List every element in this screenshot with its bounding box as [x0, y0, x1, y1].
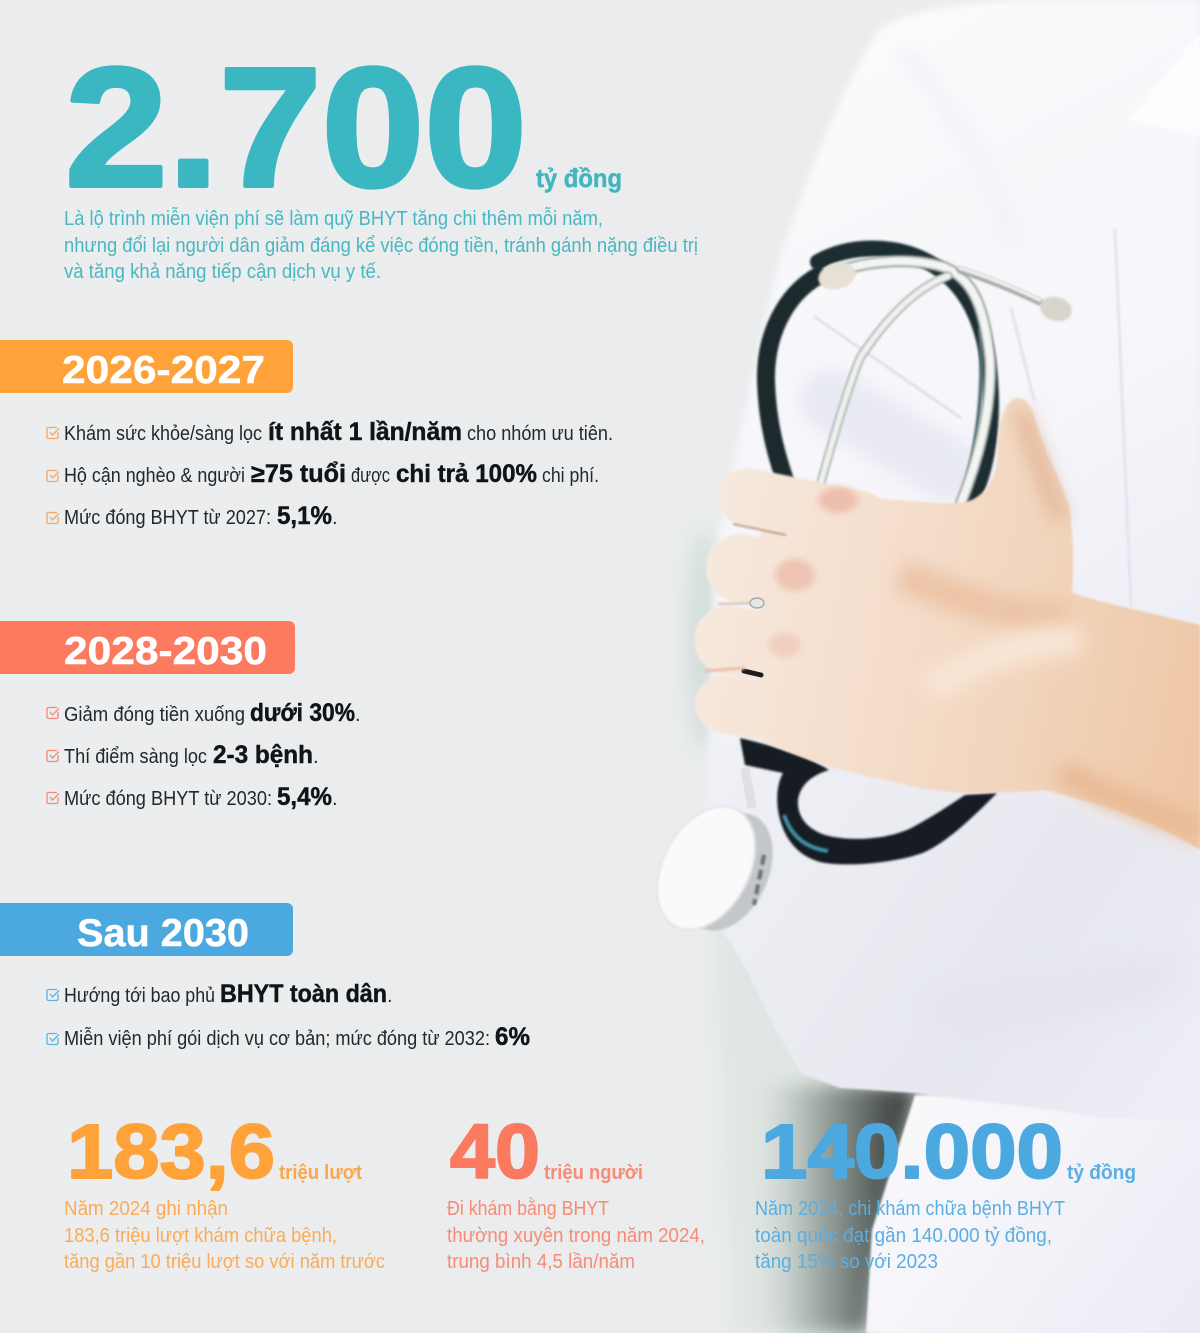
stat: 183,6 triệu lượt	[64, 1109, 385, 1273]
item 1: Khám sức khỏe/sàng lọc	[64, 423, 262, 445]
item 2: 2-3 bệnh	[213, 741, 313, 769]
stat: 40 triệu người: triệu người	[544, 1162, 643, 1184]
finger gaps	[733, 524, 786, 535]
coat lapel panel	[1128, 33, 1200, 137]
item 3: .	[332, 788, 338, 810]
coat upper body	[700, 0, 1200, 900]
intro paragraph: Là lộ trình miễn viện phí sẽ làm quỹ BHYT tăng chi thêm mỗi năm,	[64, 207, 603, 230]
stat: 140.000 tỷ đồng	[755, 1109, 1136, 1273]
item 1	[47, 699, 361, 727]
item 1: dưới 30%	[250, 699, 355, 727]
intro paragraph: nhưng đổi lại người dân giảm đáng kể việc đóng tiền, tránh gánh nặng điều trị	[64, 235, 698, 257]
stethoscope ear tips	[815, 259, 859, 293]
chest piece disc	[637, 790, 775, 946]
item 3: 5,1%	[277, 502, 332, 530]
halo behind hand	[687, 530, 719, 750]
lower coat soft fold	[930, 970, 1180, 1010]
item 3	[47, 783, 338, 811]
coat fold shadows	[815, 50, 1131, 606]
badge: Sau 2030: Sau 2030	[77, 912, 249, 955]
item 1: BHYT toàn dân	[220, 980, 387, 1008]
coat skirt below hem	[866, 1095, 1200, 1333]
stat: 183,6 triệu lượt: 183,6	[67, 1109, 275, 1195]
item 2: .	[313, 746, 319, 768]
headline unit: tỷ đồng	[536, 163, 622, 193]
item 2: Thí điểm sàng lọc	[64, 746, 207, 768]
item 2: chi trả 100%	[396, 460, 537, 488]
stat: 140.000 tỷ đồng: tỷ đồng	[1067, 1162, 1136, 1184]
ring	[750, 598, 764, 608]
finger: pinky	[724, 704, 860, 725]
tube highlight	[784, 815, 828, 851]
hand body and arm	[760, 398, 1200, 850]
stat: 40 triệu người: Đi khám bằng BHYT	[447, 1197, 609, 1220]
hand shading	[704, 410, 1200, 830]
stat: 140.000 tỷ đồng: Năm 2024, chi khám chữa bệnh BHYT	[755, 1198, 1065, 1220]
hand highlight	[930, 640, 1080, 690]
item 3: Mức đóng BHYT từ 2030:	[64, 788, 272, 810]
stat: 40 triệu người: thường xuyên trong năm 2024,	[447, 1225, 705, 1247]
item 1: ít nhất 1 lần/năm	[268, 418, 462, 446]
item 3: .	[332, 507, 338, 529]
stat: 140.000 tỷ đồng: toàn quốc đạt gần 140.000 tỷ đồng,	[755, 1225, 1052, 1247]
badge: 2026-2027	[0, 340, 293, 393]
badge: 2028-2030: 2028-2030	[64, 630, 267, 673]
dark shadow under coat hem	[745, 1085, 920, 1333]
badge: Sau 2030	[0, 903, 293, 956]
item 1: cho nhóm ưu tiên.	[467, 423, 613, 445]
stat: 183,6 triệu lượt: triệu lượt	[279, 1162, 362, 1184]
stat: 40 triệu người	[447, 1109, 705, 1273]
finger: ring	[728, 640, 860, 660]
item 1: .	[387, 985, 393, 1007]
item 3: 5,4%	[277, 783, 332, 811]
stat: 140.000 tỷ đồng: 140.000	[761, 1109, 1063, 1195]
list: 2028-2030	[47, 699, 361, 811]
item 2	[47, 460, 599, 488]
item 2: Miễn viện phí gói dịch vụ cơ bản; mức đóng từ 2032:	[64, 1027, 490, 1050]
stat: 140.000 tỷ đồng: tăng 15% so với 2023	[755, 1251, 938, 1273]
item 2: 6%	[495, 1023, 530, 1051]
tube	[740, 738, 997, 864]
stat: 183,6 triệu lượt: Năm 2024 ghi nhận	[64, 1198, 228, 1220]
arm shadow	[1060, 770, 1200, 830]
badge: 2026-2027: 2026-2027	[62, 349, 265, 392]
intro paragraph: và tăng khả năng tiếp cận dịch vụ y tế.	[64, 261, 381, 283]
item 2: ≥75 tuổi	[251, 460, 346, 488]
finger: middle	[740, 568, 860, 590]
knuckles	[818, 487, 858, 513]
stem	[745, 768, 752, 808]
tendon shadow	[900, 575, 1070, 616]
stethoscope lower tube	[740, 738, 997, 864]
soft shadow behind lower coat	[715, 900, 900, 1333]
finger: index	[747, 497, 860, 520]
thumb shade	[1020, 410, 1060, 520]
arm and hand	[724, 398, 1200, 850]
headline number: 2.700	[65, 33, 527, 223]
stat: 40 triệu người: trung bình 4,5 lần/năm	[447, 1251, 635, 1273]
stat: 183,6 triệu lượt: tăng gần 10 triệu lượt so với năm trước	[64, 1251, 385, 1273]
item 1	[47, 418, 613, 446]
item 1: Giảm đóng tiền xuống	[64, 704, 245, 726]
chest piece side	[666, 799, 790, 945]
badge: 2028-2030	[0, 621, 295, 674]
item 3	[47, 502, 338, 530]
item 2: chi phí.	[542, 465, 599, 487]
item 2	[47, 741, 319, 769]
item 1	[47, 980, 393, 1008]
chest piece dark detail	[754, 855, 764, 905]
photo: doctor holding stethoscope	[637, 0, 1200, 1333]
item 2: Hộ cận nghèo & người	[64, 465, 245, 487]
intro paragraph	[64, 207, 698, 283]
stethoscope upper tubes	[766, 248, 1040, 505]
list: Sau 2030	[47, 980, 530, 1051]
list: 2026-2027	[47, 418, 613, 530]
item 2: được	[351, 465, 390, 487]
item 1: .	[355, 704, 361, 726]
item 3: Mức đóng BHYT từ 2027:	[64, 507, 271, 529]
stat: 183,6 triệu lượt: 183,6 triệu lượt khám chữa bệnh,	[64, 1225, 337, 1247]
item 1: Hướng tới bao phủ	[64, 985, 215, 1007]
coat lower body	[708, 740, 1200, 1120]
stat: 40 triệu người: 40	[450, 1109, 540, 1195]
